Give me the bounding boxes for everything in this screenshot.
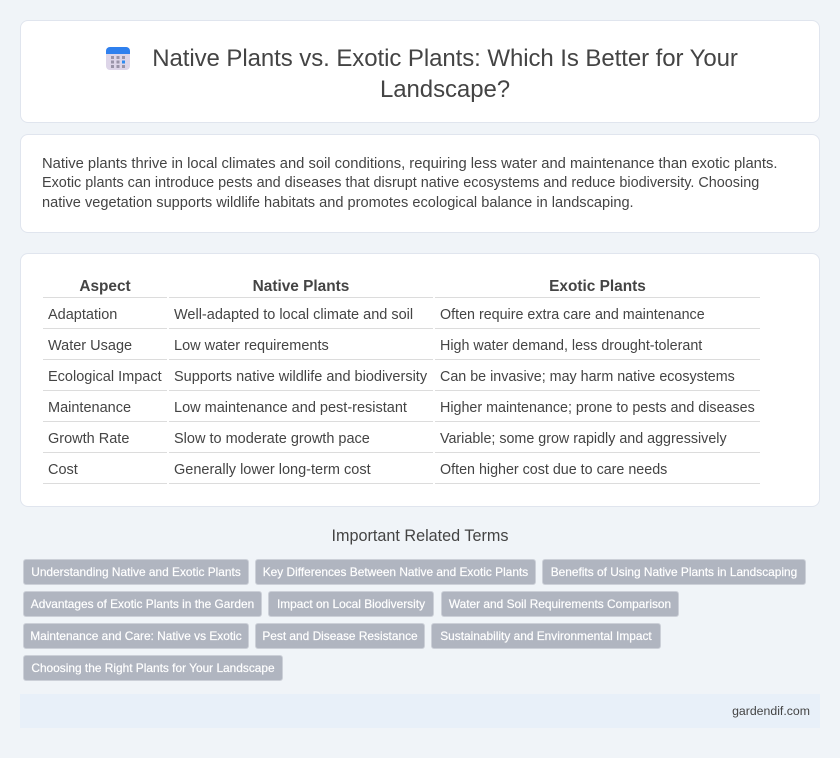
footer bar xyxy=(20,694,820,728)
comparison table: Can be invasive; may harm native ecosystems xyxy=(440,369,735,385)
intro text: Exotic plants can introduce pests and diseases that disrupt native ecosystems and reduce biodiversity. Choosing xyxy=(42,175,759,191)
comparison table: Generally lower long-term cost xyxy=(174,462,371,478)
comparison table: Native Plants xyxy=(253,278,349,295)
related term tags: Key Differences Between Native and Exotic Plants xyxy=(263,565,528,579)
intro text: Native plants thrive in local climates and soil conditions, requiring less water and maintenance than exotic plants. xyxy=(42,156,777,172)
comparison table: Ecological Impact xyxy=(48,369,162,385)
intro text: native vegetation supports wildlife habitats and promotes ecological balance in landscaping. xyxy=(42,195,634,211)
comparison table: Slow to moderate growth pace xyxy=(174,431,370,447)
comparison table: Adaptation xyxy=(48,307,117,323)
related term tags: Understanding Native and Exotic Plants xyxy=(31,565,241,579)
comparison table: Water Usage xyxy=(48,338,132,354)
related term tags: Water and Soil Requirements Comparison xyxy=(449,597,671,611)
comparison table: Higher maintenance; prone to pests and diseases xyxy=(440,400,755,416)
related terms heading: Important Related Terms xyxy=(332,527,508,545)
related term tags: Sustainability and Environmental Impact xyxy=(440,629,652,643)
comparison table: Growth Rate xyxy=(48,431,129,447)
comparison table: Often require extra care and maintenance xyxy=(440,307,705,323)
title xyxy=(152,45,738,103)
related term tags: Benefits of Using Native Plants in Landscaping xyxy=(551,565,797,579)
intro text xyxy=(42,156,777,211)
footer source text: gardendif.com xyxy=(732,704,810,718)
comparison table xyxy=(43,278,760,484)
comparison table: Exotic Plants xyxy=(549,278,646,295)
comparison table: Often higher cost due to care needs xyxy=(440,462,667,478)
comparison table: Variable; some grow rapidly and aggressively xyxy=(440,431,727,447)
related term tags xyxy=(23,559,806,681)
comparison table: Supports native wildlife and biodiversity xyxy=(174,369,427,385)
related term tags: Maintenance and Care: Native vs Exotic xyxy=(30,629,242,643)
title: Landscape? xyxy=(380,76,510,103)
related term tags: Choosing the Right Plants for Your Landscape xyxy=(31,661,275,675)
comparison table: Well-adapted to local climate and soil xyxy=(174,307,413,323)
panel: header xyxy=(20,20,820,123)
icon: calendar xyxy=(106,47,130,70)
comparison table: Maintenance xyxy=(48,400,131,416)
comparison table: Aspect xyxy=(79,278,131,295)
comparison table: High water demand, less drought-tolerant xyxy=(440,338,702,354)
title: Native Plants vs. Exotic Plants: Which Is Better for Your xyxy=(152,45,738,72)
comparison table: Low water requirements xyxy=(174,338,329,354)
related term tags: Pest and Disease Resistance xyxy=(262,629,418,643)
comparison table: Cost xyxy=(48,462,78,478)
related term tags: Impact on Local Biodiversity xyxy=(277,597,425,611)
comparison table: Low maintenance and pest-resistant xyxy=(174,400,407,416)
panel: comparison table xyxy=(20,253,820,507)
related term tags: Advantages of Exotic Plants in the Garden xyxy=(31,597,254,611)
panel: introduction xyxy=(20,134,820,233)
